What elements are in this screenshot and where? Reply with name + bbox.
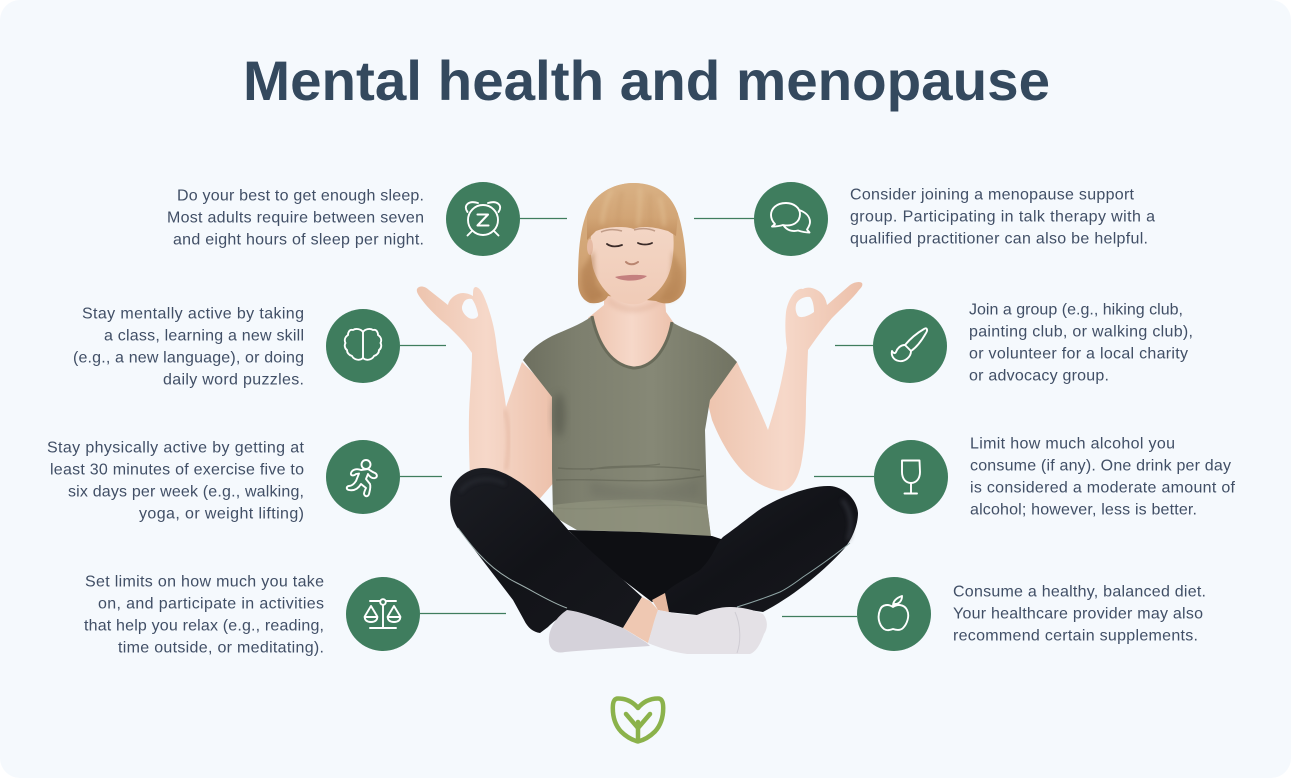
tip: diet: Consume a healthy, balanced diet. xyxy=(953,583,1206,600)
right leg xyxy=(665,486,858,615)
tip: community group: Join a group (e.g., hiking club, xyxy=(969,301,1183,318)
right arm and hand xyxy=(706,282,862,491)
tip: alcohol: is considered a moderate amount of xyxy=(970,479,1236,496)
icon: brain xyxy=(326,309,400,383)
shirt folds xyxy=(556,464,706,509)
eyebrows xyxy=(601,229,655,232)
left sock xyxy=(549,610,650,653)
photo: woman meditating xyxy=(417,183,862,654)
tip: sleep: and eight hours of sleep per night. xyxy=(173,231,424,248)
icon: wine glass xyxy=(874,440,948,514)
tip: mentally active: (e.g., a new language), or doing xyxy=(73,349,304,366)
left arm and hand xyxy=(417,286,556,510)
tip: diet xyxy=(953,583,1206,644)
tip: sleep: Do your best to get enough sleep. xyxy=(177,187,424,204)
tip: alcohol xyxy=(970,435,1236,518)
ankle skin xyxy=(623,597,658,643)
neck shadow xyxy=(608,296,662,313)
tip: physically active: Stay physically active by getting at xyxy=(47,439,305,456)
icon: alarm clock xyxy=(446,182,520,256)
icon: paint brush xyxy=(873,309,947,383)
logo: green leaf heart xyxy=(613,698,663,742)
fringe xyxy=(587,183,678,240)
tip: boundaries and relaxation: Set limits on how much you take xyxy=(85,573,324,590)
hips xyxy=(568,530,724,602)
title: Mental health and menopause xyxy=(243,49,1050,112)
tip: diet: recommend certain supplements. xyxy=(953,627,1198,644)
tip: boundaries and relaxation: that help you relax (e.g., reading, xyxy=(84,617,324,634)
tip: sleep xyxy=(167,187,424,248)
tip: support group xyxy=(850,186,1155,247)
right sock xyxy=(648,607,767,654)
closed eyes xyxy=(607,243,652,246)
tip: mentally active xyxy=(73,305,304,388)
tip: sleep: Most adults require between seven xyxy=(167,209,424,226)
tip: support group: Consider joining a menopause support xyxy=(850,186,1135,203)
icon: balance scales xyxy=(346,577,420,651)
shirt lower band xyxy=(553,499,711,537)
tip: community group: or advocacy group. xyxy=(969,367,1109,384)
knee highlight xyxy=(842,500,851,540)
tip: physically active: yoga, or weight lifting) xyxy=(139,505,304,522)
tip: alcohol: alcohol; however, less is better. xyxy=(970,501,1197,518)
tip: physically active: least 30 minutes of exercise five to xyxy=(50,461,304,478)
left leg xyxy=(450,468,642,633)
tip: alcohol: Limit how much alcohol you xyxy=(970,435,1175,452)
face xyxy=(591,225,674,304)
ear left xyxy=(587,239,593,255)
tip: physically active: six days per week (e.g., walking, xyxy=(68,483,304,500)
icon: speech bubbles xyxy=(754,182,828,256)
tip: community group: painting club, or walking club), xyxy=(969,323,1193,340)
small foot skin xyxy=(652,593,669,612)
tip: mentally active: Stay mentally active by taking xyxy=(82,305,304,322)
tip: support group: qualified practitioner can also be helpful. xyxy=(850,230,1148,247)
underarm shadow xyxy=(553,393,565,437)
icon: apple xyxy=(857,577,931,651)
icon: runner xyxy=(326,440,400,514)
tip: diet: Your healthcare provider may also xyxy=(953,605,1203,622)
leggings seams xyxy=(458,528,567,608)
tip: support group: group. Participating in talk therapy with a xyxy=(850,208,1155,225)
tip: alcohol: consume (if any). One drink per day xyxy=(970,457,1231,474)
nose xyxy=(626,262,638,264)
tip: mentally active: a class, learning a new skill xyxy=(104,327,304,344)
tip: mentally active: daily word puzzles. xyxy=(163,371,304,388)
arm crease shading left xyxy=(505,410,509,470)
tip: boundaries and relaxation: on, and participate in activities xyxy=(98,595,324,612)
tip: boundaries and relaxation: time outside, or meditating). xyxy=(118,639,324,656)
shirt xyxy=(523,316,737,537)
shirt collar xyxy=(592,316,672,368)
tip: community group xyxy=(969,301,1193,384)
tip: physically active xyxy=(47,439,305,522)
tip: community group: or volunteer for a local charity xyxy=(969,345,1188,362)
hair back xyxy=(578,183,686,303)
neck and chest xyxy=(588,285,676,372)
mouth xyxy=(615,275,647,281)
tip: boundaries and relaxation xyxy=(84,573,324,656)
connector lines xyxy=(400,218,874,616)
